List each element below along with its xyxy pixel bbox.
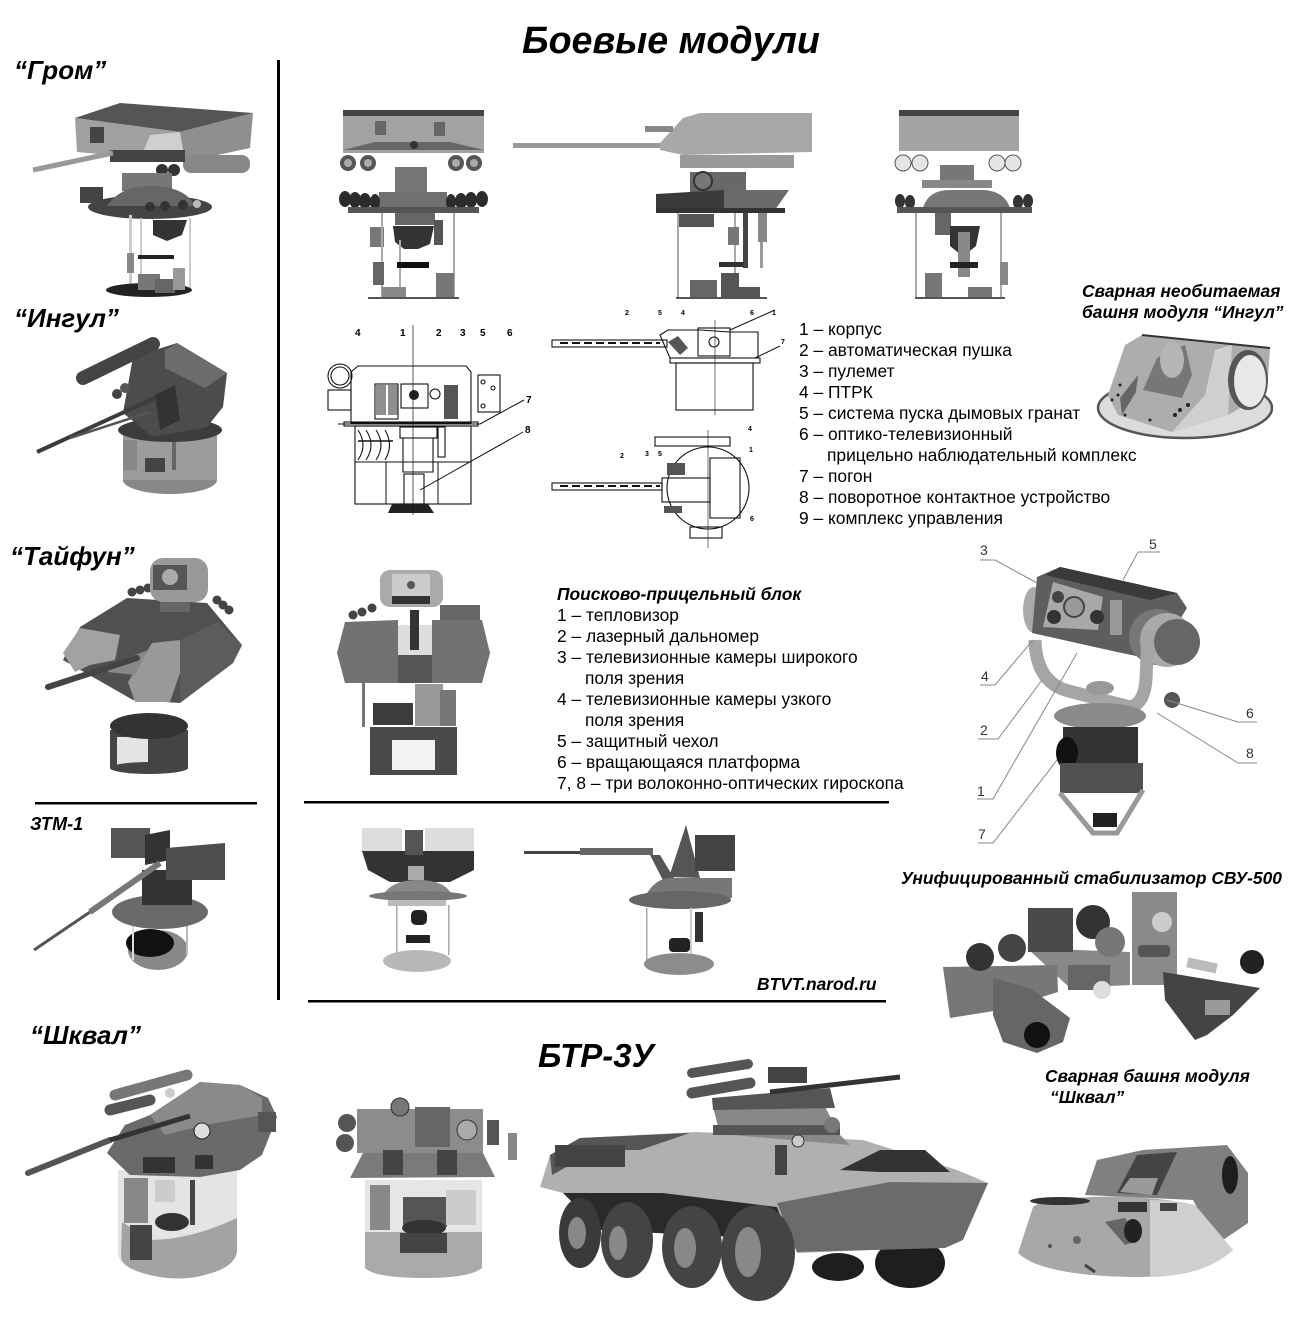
schematic: top view: 2 bbox=[620, 453, 624, 460]
illustration: search and sight unit bbox=[1023, 567, 1200, 833]
heading: Grom: “Гром” bbox=[14, 55, 106, 85]
legend: search and sight unit: 5 – защитный чехол bbox=[557, 731, 719, 751]
schematic: front section: 5 bbox=[480, 328, 486, 339]
leader lines and callout numbers: 1 bbox=[977, 783, 985, 799]
illustration: welded Shkval turret bbox=[1018, 1145, 1248, 1277]
schematic: front section: 1 bbox=[400, 328, 406, 339]
legend: module parts: 9 – комплекс управления bbox=[799, 508, 1003, 528]
illustration: welded Ingul turret bbox=[1098, 335, 1272, 438]
caption: welded Shkval turret bbox=[1045, 1066, 1250, 1107]
legend: module parts: 7 – погон bbox=[799, 466, 872, 486]
legend: search and sight unit: 1 – тепловизор bbox=[557, 605, 679, 625]
legend: search and sight unit: 6 – вращающаяся платформа bbox=[557, 752, 800, 772]
leader lines and callout numbers: 4 bbox=[981, 668, 989, 684]
illustration: ZTM-1 front view bbox=[362, 828, 474, 972]
heading: Ingul: “Ингул” bbox=[14, 303, 119, 333]
schematic: top view: 1 bbox=[749, 447, 753, 454]
illustration: ZTM-1 side view bbox=[524, 825, 735, 975]
illustration: Ingul module bbox=[37, 343, 227, 494]
schematic: side view: 6 bbox=[750, 310, 754, 317]
schematic: front section bbox=[328, 325, 532, 515]
schematic: top view: 6 bbox=[750, 516, 754, 523]
legend: module parts: 6 – оптико-телевизионный bbox=[799, 424, 1012, 444]
caption: welded Shkval turret: “Шквал” bbox=[1050, 1087, 1125, 1107]
legend: search and sight unit: 2 – лазерный дальномер bbox=[557, 626, 759, 646]
source credit: BTVT.narod.ru bbox=[757, 974, 877, 994]
horizontal divider left bbox=[35, 802, 257, 804]
schematic: side view: 7 bbox=[781, 339, 785, 346]
legend: module parts: 4 – ПТРК bbox=[799, 382, 874, 402]
illustration: Taifun with sight, front view bbox=[337, 570, 490, 775]
legend: module parts: прицельно наблюдательный комплекс bbox=[827, 445, 1137, 465]
legend: module parts: 5 – система пуска дымовых гранат bbox=[799, 403, 1080, 423]
illustration: Shkval module bbox=[28, 1075, 277, 1279]
panel: Grom side view bbox=[513, 113, 812, 299]
legend: module parts: 8 – поворотное контактное устройство bbox=[799, 487, 1110, 507]
schematic: side view: 5 bbox=[658, 310, 662, 317]
legend: search and sight unit: поля зрения bbox=[585, 668, 684, 688]
schematic: top view: 3 bbox=[645, 451, 649, 458]
illustration: BTR-3U vehicle bbox=[540, 1064, 988, 1301]
schematic: front section: 3 bbox=[460, 328, 466, 339]
legend: module parts: 3 – пулемет bbox=[799, 361, 895, 381]
legend: search and sight unit: 4 – телевизионные камеры узкого bbox=[557, 689, 831, 709]
schematic: side view: 2 bbox=[625, 310, 629, 317]
caption: welded unmanned turret: башня модуля “Ингул” bbox=[1082, 302, 1284, 322]
legend: search and sight unit bbox=[557, 584, 904, 793]
illustration: Shkval cutaway front view bbox=[336, 1098, 517, 1278]
legend: search and sight unit: 7, 8 – три волоконно-оптических гироскопа bbox=[557, 773, 904, 793]
title: Боевые модули bbox=[522, 19, 820, 61]
schematic: side view: 4 bbox=[681, 310, 685, 317]
caption: welded Shkval turret: Сварная башня модуля bbox=[1045, 1066, 1250, 1086]
caption: welded unmanned turret: Сварная необитаемая bbox=[1082, 281, 1280, 301]
leader lines and callout numbers: 2 bbox=[980, 722, 988, 738]
schematic: side view bbox=[552, 310, 785, 415]
heading: ZTM-1: ЗТМ-1 bbox=[30, 814, 83, 834]
heading: Taifun: “Тайфун” bbox=[10, 541, 135, 571]
caption: unified stabilizer: Унифицированный стабилизатор СВУ-500 bbox=[901, 868, 1282, 888]
schematic: front section: 8 bbox=[525, 425, 531, 436]
legend: search and sight unit: 3 – телевизионные камеры широкого bbox=[557, 647, 858, 667]
horizontal divider bottom bbox=[308, 1000, 886, 1002]
leader lines and callout numbers: 7 bbox=[978, 826, 986, 842]
legend: search and sight unit: поля зрения bbox=[585, 710, 684, 730]
schematic: top view: 5 bbox=[658, 451, 662, 458]
leader lines and callout numbers: 5 bbox=[1149, 536, 1157, 552]
leader lines and callout numbers bbox=[977, 536, 1257, 843]
legend: module parts: 1 – корпус bbox=[799, 319, 882, 339]
panel: Grom front view bbox=[339, 110, 488, 299]
illustration: Grom module bbox=[33, 103, 253, 297]
legend: search and sight unit: Поисково-прицельный блок bbox=[557, 584, 802, 604]
leader lines and callout numbers: 6 bbox=[1246, 705, 1254, 721]
illustration: SVU-500 stabilizer bbox=[943, 892, 1264, 1053]
panel: Grom rear view bbox=[895, 110, 1033, 299]
caption: welded unmanned turret bbox=[1082, 281, 1284, 322]
heading: Shkval: “Шквал” bbox=[30, 1020, 141, 1050]
legend: module parts bbox=[799, 319, 1137, 528]
legend: module parts: 2 – автоматическая пушка bbox=[799, 340, 1012, 360]
horizontal divider middle bbox=[304, 801, 889, 804]
schematic: front section: 6 bbox=[507, 328, 513, 339]
schematic: front section: 2 bbox=[436, 328, 442, 339]
leader lines and callout numbers: 8 bbox=[1246, 745, 1254, 761]
schematic: front section: 7 bbox=[526, 395, 532, 406]
heading: BTR-3U: БТР-3У bbox=[538, 1037, 657, 1074]
vertical divider bbox=[277, 60, 280, 1000]
schematic: side view: 1 bbox=[772, 310, 776, 317]
schematic: top view bbox=[552, 426, 754, 548]
schematic: front section: 4 bbox=[355, 328, 361, 339]
illustration: ZTM-1 module bbox=[34, 828, 225, 970]
leader lines and callout numbers: 3 bbox=[980, 542, 988, 558]
schematic: top view: 4 bbox=[748, 426, 752, 433]
illustration: Taifun module bbox=[48, 558, 242, 774]
